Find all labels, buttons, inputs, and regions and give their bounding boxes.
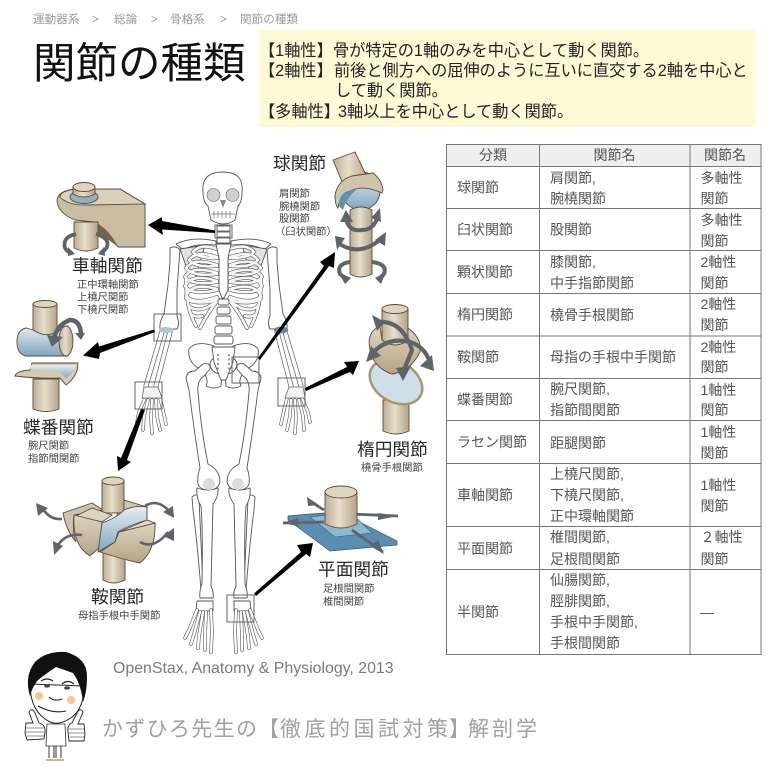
pivot examples: 上橈尺関節 [77,290,128,304]
row: ball: 腕橈関節 [550,190,606,206]
table header: 関節名 [594,147,636,163]
ball examples: 股関節 [279,212,310,225]
row: amphiarthrosis: 脛腓関節, [550,593,610,609]
hinge examples: 腕尺関節 [28,439,69,452]
row: plane: 足根間関節 [550,551,620,567]
title: 関節の種類 [33,41,246,88]
row: ball: 肩関節, [550,170,596,186]
definition: 2-axis: して動く関節。 [335,82,448,100]
row: ellipsoid: 2軸性 [700,296,736,312]
ellipsoid examples: 橈骨手根関節 [361,461,423,474]
row: pivot: 正中環軸関節 [550,508,634,524]
ball examples: 腕橈関節 [279,200,320,213]
row: condylar: 膝関節, [550,254,596,270]
breadcrumb: 関節の種類 [240,12,298,26]
citation: OpenStax, Anatomy & Physiology, 2013 [113,660,394,677]
footer title: 徹底的国試対策 [280,718,448,741]
table [446,144,761,654]
ball name: 球関節 [273,154,326,174]
row: condylar: 関節 [700,275,728,291]
row: spiral [457,424,736,461]
row: ellipsoid: 関節 [700,317,728,333]
row: plane: 関節 [700,551,728,567]
row: ball: 関節 [700,190,728,206]
row: hinge: 関節 [700,402,728,418]
mascot: cartoon doctor [25,652,87,760]
row: pivot [457,466,736,524]
arrow: ankle to plane joint [254,543,313,596]
row: saddle: 2軸性 [700,339,736,355]
plane illustration [282,486,398,554]
spine and sternum [212,226,235,380]
definition: 1-axis: 骨が特定の1軸のみを中心として動く関節。 [333,42,649,60]
highlight boxes [135,225,305,622]
arrow: hip to ball joint [258,252,335,360]
skeleton bones, left [160,239,222,611]
table header: 分類 [479,147,507,163]
row: ellipsoid: 橈骨手根関節 [550,307,634,323]
definition: 1-axis: 【1軸性】 [259,42,333,60]
footer title [102,718,537,741]
joint: saddle [36,477,174,622]
ball examples: 肩関節 [279,187,310,200]
footer title: 】 [449,718,470,741]
footer title: かずひろ先生の [102,718,257,741]
joint: ball [273,152,386,284]
row: condylar: 中手指節関節 [550,275,634,291]
row: saddle: 関節 [700,359,728,375]
hinge examples [28,439,79,465]
ball examples: （臼状関節） [275,225,337,238]
definition box [259,30,756,127]
row: spiral: 関節 [700,445,728,461]
row: hinge [457,381,736,418]
plane examples: 椎間関節 [323,595,364,608]
plane name: 平面関節 [318,560,389,580]
arrow: wrist to saddle joint [117,409,145,471]
saddle illustration [36,477,174,583]
definition: 2-axis: 【2軸性】 [259,62,333,80]
table header [446,144,761,166]
definition: multi-axis: 【多軸性】 [259,103,340,121]
saddle name: 鞍関節 [91,587,144,607]
breadcrumb: 総論 [114,12,138,26]
row: hinge: 腕尺関節, [550,381,610,397]
row: saddle: 母指の手根中手関節 [550,349,676,365]
row: hinge: 蝶番関節 [457,392,513,408]
row: spiral: 距腿関節 [550,435,606,451]
ellipsoid illustration [362,304,434,434]
saddle examples: 母指手根中手関節 [78,609,160,622]
joint: plane [282,486,398,608]
row: cotyloid: 多軸性 [700,212,742,228]
row: pivot: 車軸関節 [457,487,513,503]
ball illustration [333,152,386,284]
breadcrumb [33,12,298,26]
ellipsoid name: 楕円関節 [357,440,428,460]
arrow: wrist to ellipsoid joint [305,361,359,391]
row: amphiarthrosis: 手根間関節 [550,635,620,651]
joint: ellipsoid [357,304,434,474]
arrow: elbow to hinge joint [83,330,155,359]
table grid [446,144,761,654]
skeleton [135,172,310,652]
ribs [185,247,262,328]
row: plane: 平面関節 [457,540,513,556]
row: spiral: 1軸性 [700,424,736,440]
row: ball: 球関節 [457,180,499,196]
breadcrumb: 運動器系 [33,12,80,26]
hinge examples: 指節間関節 [28,452,79,465]
arms and hands [137,326,310,433]
row: pivot: 上橈尺関節, [550,466,624,482]
pivot name: 車軸関節 [72,256,143,276]
breadcrumb: > [92,13,99,26]
row: pivot: 1軸性 [700,477,736,493]
hinge illustration [15,300,85,412]
row: saddle: 鞍関節 [457,349,499,365]
row: cotyloid: 股関節 [550,222,592,238]
breadcrumb: > [220,13,227,26]
joint: pivot [57,182,145,316]
feet [185,610,262,652]
breadcrumb: 骨格系 [170,12,205,26]
row: cotyloid: 関節 [700,233,728,249]
row: cotyloid [457,212,742,249]
row: hinge: 1軸性 [700,382,736,398]
joint: hinge [15,300,94,465]
footer title: 【 [258,718,279,741]
definition: 2-axis: 前後と側方への屈伸のように互いに直交する2軸を中心と [334,62,748,80]
breadcrumb: > [151,13,158,26]
row: cotyloid: 臼状関節 [457,222,513,238]
row: pivot: 関節 [700,498,728,514]
patellae [203,478,244,490]
plane examples: 足根間関節 [323,582,374,595]
definition: multi-axis: 3軸以上を中心として動く関節。 [338,103,573,121]
row: spiral: ラセン関節 [457,434,527,450]
row: condylar: 顆状関節 [457,264,513,280]
arrow: neck to pivot joint [148,217,215,235]
row: ellipsoid: 楕円関節 [457,306,513,322]
row: plane [457,529,742,567]
row: plane: ２軸性 [700,529,742,545]
row: condylar: 2軸性 [700,254,736,270]
row: ellipsoid [457,296,736,333]
pivot illustration [57,182,145,256]
skeleton bones, right [225,239,287,611]
pivot examples: 正中環軸関節 [77,278,139,291]
row: saddle [457,339,736,375]
row: hinge: 指節間関節 [550,402,620,418]
row: amphiarthrosis: 仙腸関節, [550,572,610,588]
row: amphiarthrosis: 手根中手関節, [550,614,638,630]
sacral foramina [218,354,229,370]
pivot examples [77,278,139,316]
row: condylar [457,254,736,291]
row: amphiarthrosis: 半関節 [457,604,499,620]
hinge name: 蝶番関節 [23,418,94,438]
ball examples [275,187,337,238]
row: amphiarthrosis: — [700,604,714,620]
row: ball: 多軸性 [700,170,742,186]
footer title: 解剖学 [468,718,537,741]
skull [203,172,242,224]
row: plane: 椎間関節, [550,529,610,545]
arrows [83,217,359,596]
plane examples [323,582,374,608]
row: pivot: 下橈尺関節, [550,487,624,503]
row: amphiarthrosis [457,572,714,651]
pivot examples: 下橈尺関節 [77,303,128,316]
row: ball [457,170,742,206]
table header: 関節名 [704,147,746,163]
